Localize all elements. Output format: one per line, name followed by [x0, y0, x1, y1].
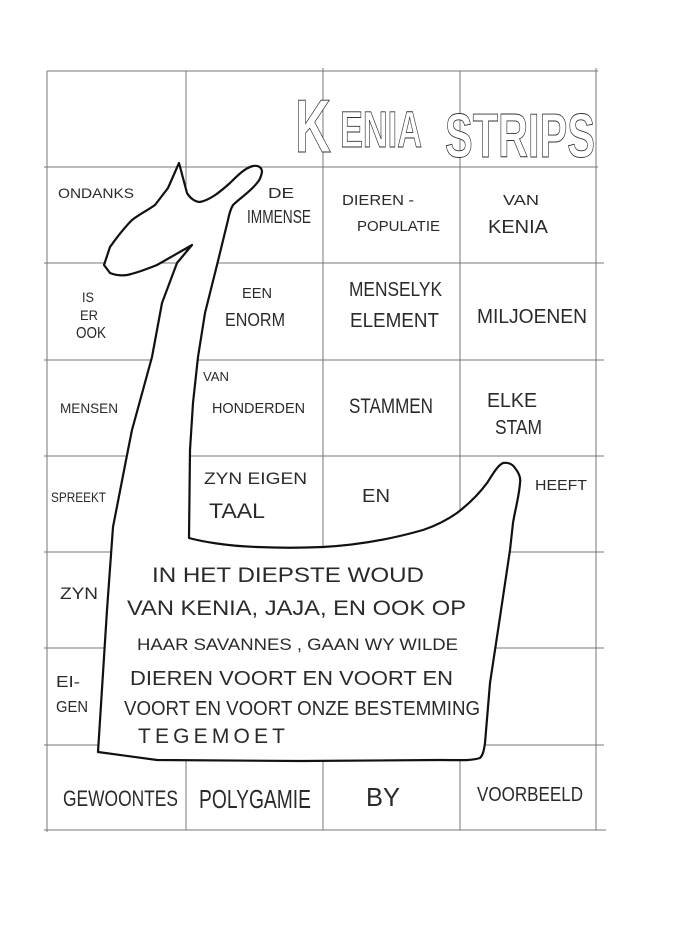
giraffe shape [98, 163, 520, 761]
giraffe caption [124, 564, 480, 748]
grid words: ELEMENT [350, 310, 439, 332]
grid words: STAM [495, 417, 542, 439]
grid words: POLYGAMIE [199, 784, 311, 814]
giraffe caption: DIEREN VOORT EN VOORT EN [130, 668, 453, 690]
grid words: ZYN EIGEN [204, 469, 307, 488]
title: ENIA [340, 101, 422, 158]
grid words: GEWOONTES [63, 786, 178, 811]
grid words: DE [268, 185, 294, 202]
grid words: VOORBEELD [477, 784, 583, 806]
grid words [51, 185, 587, 814]
giraffe caption: IN HET DIEPSTE WOUD [152, 564, 424, 587]
title: STRIPS [445, 102, 595, 171]
grid words: IS [82, 289, 94, 305]
grid words: OOK [76, 325, 106, 342]
grid words: DIEREN - [342, 192, 414, 209]
grid words: EEN [242, 285, 272, 302]
grid words: ONDANKS [58, 185, 134, 201]
grid words: BY [366, 782, 400, 812]
giraffe caption: VOORT EN VOORT ONZE BESTEMMING [124, 698, 480, 720]
grid words: IMMENSE [247, 207, 311, 227]
grid words: STAMMEN [349, 395, 433, 418]
grid words: MENSELYK [349, 279, 443, 301]
giraffe caption: VAN KENIA, JAJA, EN OOK OP [127, 597, 466, 620]
grid words: MILJOENEN [477, 306, 587, 328]
grid words: ENORM [225, 310, 285, 330]
giraffe caption: TEGEMOET [138, 725, 285, 748]
grid words: POPULATIE [357, 218, 440, 235]
title: K [295, 84, 331, 168]
grid words: GEN [56, 699, 88, 716]
grid words: HEEFT [535, 477, 587, 494]
grid words: ELKE [487, 390, 537, 412]
grid words: VAN [203, 369, 229, 384]
grid words: ER [80, 307, 98, 323]
grid words: EN [362, 486, 390, 506]
grid words: SPREEKT [51, 489, 106, 505]
title [295, 84, 595, 171]
grid words: ZYN [60, 584, 98, 603]
grid words: MENSEN [60, 400, 118, 416]
grid words: KENIA [488, 217, 548, 237]
grid words: VAN [503, 192, 539, 209]
grid words: TAAL [209, 500, 265, 523]
grid words: EI- [56, 674, 80, 691]
grid words: HONDERDEN [212, 400, 305, 417]
giraffe caption: HAAR SAVANNES , GAAN WY WILDE [137, 635, 458, 654]
